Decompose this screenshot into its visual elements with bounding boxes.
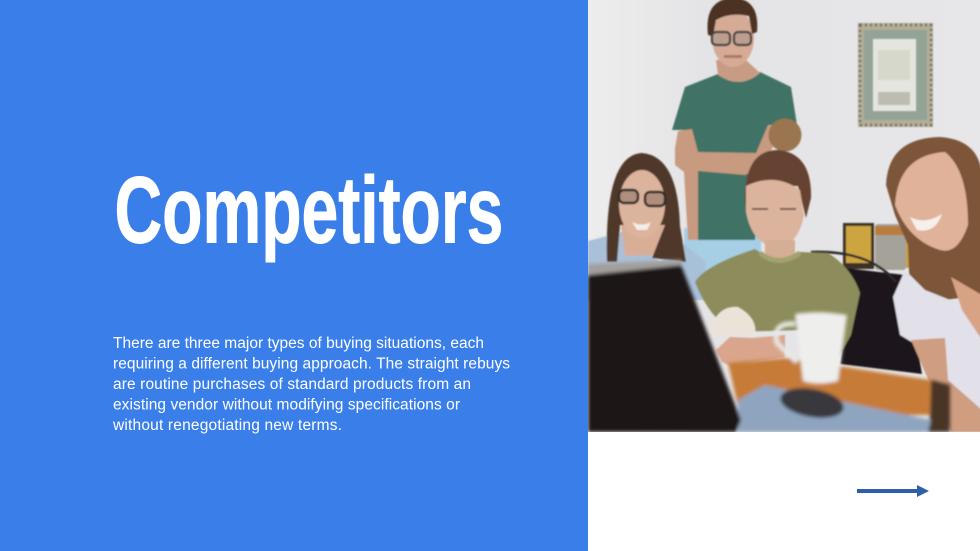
body text [112, 335, 510, 434]
papers under the mouse [738, 385, 931, 432]
dark chair [840, 268, 923, 375]
body text: are routine purchases of standard products from an [113, 376, 471, 393]
woman with glasses, left [588, 153, 706, 300]
body text: There are three major types of buying situations, each [113, 335, 484, 352]
arrow [857, 485, 929, 497]
body text: without renegotiating new terms. [112, 417, 342, 434]
picture frame on the wall [858, 23, 933, 127]
body text: existing vendor without modifying specifications or [113, 396, 460, 414]
woman in green sweater, centre [695, 118, 860, 368]
photo: team around a laptop [588, 0, 980, 432]
computer mouse [778, 386, 846, 420]
laptop screen [588, 265, 741, 432]
shelf items [843, 223, 918, 270]
panel: blue background [0, 0, 588, 551]
wooden table [728, 358, 931, 415]
title: Competitors [114, 158, 503, 263]
white mug [776, 312, 847, 384]
body text: requiring a different buying approach. The straight rebuys [113, 356, 510, 372]
right woman smiling [886, 137, 980, 432]
man standing [672, 0, 797, 278]
